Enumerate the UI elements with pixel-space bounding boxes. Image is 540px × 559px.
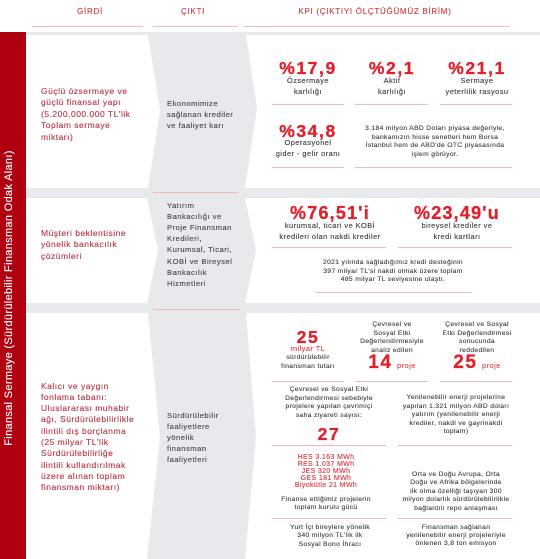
kpi label: aktif: Aktif bbox=[384, 76, 400, 85]
renewable investment note: Yenilenebilir enerji projelerine bbox=[407, 394, 505, 401]
kpi: retail credit: %23,49'u bbox=[414, 203, 500, 223]
market value note: işlem görüyor. bbox=[412, 151, 458, 158]
repo agreement note: bağlantılı repo anlaşması bbox=[414, 504, 498, 512]
band: middle one bbox=[26, 188, 540, 198]
rejected projects note bbox=[443, 321, 511, 354]
credit support note: 397 milyar TL'si nakdi olmak üzere toplam bbox=[323, 268, 463, 275]
credit support note: 485 milyar TL seviyesine ulaştı. bbox=[341, 276, 445, 283]
output text: row three: finansman bbox=[167, 444, 207, 453]
kpi label: ozsermaye: Özsermaye bbox=[287, 76, 329, 85]
rule bbox=[440, 104, 512, 105]
repo agreement note: Orta ve Doğu Avrupa, Orta bbox=[412, 470, 500, 478]
output text: row one: sağlanan krediler bbox=[167, 110, 233, 118]
input text: row three: ilintili dış borçlanma bbox=[41, 426, 126, 436]
social bond note: Sosyal Bono İhracı bbox=[299, 541, 361, 548]
renewable investment note: toplam) bbox=[444, 428, 468, 435]
emission note bbox=[406, 524, 506, 547]
output text: row two: Proje Finansman bbox=[167, 223, 232, 232]
output text: row two: Bankacılığı ve bbox=[167, 212, 222, 221]
renewable investment note: krediler, nakdi ve gayrinakdi bbox=[410, 420, 502, 427]
analysed projects note: Çevresel ve bbox=[372, 321, 412, 328]
input text: row three: ilintili kullandırılmak bbox=[41, 460, 126, 470]
kpi: corporate credit: %76,51'i bbox=[290, 203, 370, 223]
analysed projects note: Sosyal Etki bbox=[373, 330, 411, 337]
input text: row three: ağı, Sürdürülebilirlikle bbox=[41, 414, 134, 424]
chevron: row one bbox=[148, 35, 257, 188]
emission note: önlenen 3,8 ton emisyon bbox=[415, 540, 497, 547]
sidebar bbox=[0, 32, 26, 559]
market value note bbox=[365, 125, 505, 158]
rule bbox=[355, 104, 428, 105]
stat label: sustainable finance: sürdürülebilir bbox=[286, 354, 330, 361]
output text: row three: faaliyetlere bbox=[167, 422, 210, 431]
input text: row three: Kalıcı ve yaygın bbox=[41, 380, 109, 390]
output text: row two: Kredileri, bbox=[167, 234, 202, 243]
kpi label: ozsermaye bbox=[287, 76, 329, 96]
input text: row two: çözümleri bbox=[41, 250, 82, 260]
heading: kpi: KPI (ÇIKTIYI ÖLÇTÜĞÜMÜZ BİRİM) bbox=[298, 7, 452, 16]
installed capacity label: toplam kurulu gücü bbox=[294, 504, 357, 510]
header rule: cikti bbox=[153, 26, 238, 27]
rule bbox=[355, 381, 428, 382]
kpi label: operasyonel: gider - gelir oranı bbox=[276, 148, 340, 158]
market value note: 3.184 milyon ABD Doları piyasa değeriyle, bbox=[365, 125, 505, 132]
emission note: Finansman sağlanan bbox=[422, 524, 490, 531]
repo agreement note bbox=[402, 470, 510, 512]
rule bbox=[272, 518, 386, 519]
kpi label: ozsermaye: karlılığı bbox=[294, 86, 322, 96]
analysed projects note: Değerlendirmesiyle bbox=[360, 338, 424, 345]
input text: row three: fonlama tabanı: bbox=[41, 392, 107, 402]
output text: row one bbox=[167, 98, 233, 130]
renewable investment note: yatırım (yenilenebilir enerji bbox=[412, 411, 500, 418]
output text: row three: Sürdürülebilir bbox=[167, 410, 219, 420]
rejected projects note: sonucunda bbox=[459, 338, 495, 345]
renewable investment note: yapılan 1.321 milyon ABD doları bbox=[403, 403, 509, 410]
kpi: sermaye: %21,1 bbox=[448, 58, 506, 78]
output text: row two: KOBİ ve Bireysel bbox=[167, 257, 232, 266]
kpi label: operasyonel: Operasyonel bbox=[285, 138, 331, 147]
rule: chevron two bbox=[153, 309, 240, 310]
site visits note: Çevresel ve Sosyal Etki bbox=[290, 386, 368, 393]
kpi label: corporate credit bbox=[279, 221, 381, 240]
installed capacity label bbox=[281, 496, 371, 510]
kpi label: corporate credit: kurumsal, ticari ve KOBİ bbox=[285, 221, 375, 230]
installed capacity list: GES 181 MWh bbox=[301, 475, 351, 482]
rejected projects note: reddedilen bbox=[460, 347, 494, 354]
rejected projects note: Çevresel ve Sosyal bbox=[445, 321, 509, 328]
rule bbox=[315, 292, 472, 293]
installed capacity list bbox=[295, 454, 357, 489]
input text: row one: miktarı) bbox=[41, 132, 73, 142]
stat unit: milyar TL: milyar TL bbox=[291, 344, 325, 353]
kpi label: sermaye bbox=[446, 76, 508, 96]
input text: row three: Sürdürülebilirliğe bbox=[41, 448, 113, 458]
input text: row three: Uluslararası muhabir bbox=[41, 403, 129, 413]
kpi label: retail credit bbox=[422, 221, 492, 240]
site visits note bbox=[285, 386, 373, 419]
rule bbox=[398, 247, 512, 248]
social bond note bbox=[290, 524, 370, 548]
output text: row two: Hizmetleri bbox=[167, 279, 206, 288]
input text: row one: güçlü finansal yapı bbox=[41, 97, 121, 107]
rule bbox=[272, 247, 386, 248]
output text: row one: Ekonomimize bbox=[167, 98, 218, 108]
installed capacity label: Finanse ettiğimiz projelerin bbox=[281, 496, 371, 502]
heading: cikti: ÇIKTI bbox=[181, 7, 205, 16]
input text: row three: (25 milyar TL'lik bbox=[41, 437, 109, 447]
stat: 25 proje: 25 proje bbox=[453, 352, 501, 373]
repo agreement note: ilk olma özelliği taşıyan 300 bbox=[410, 488, 502, 494]
site visits note: Değerlendirmesi sebebiyle bbox=[285, 395, 373, 402]
kpi: ozsermaye: %17,9 bbox=[279, 58, 337, 78]
stat label: sustainable finance: finansman tutarı bbox=[281, 363, 335, 370]
site visits note: projelere yapılan çevrimiçi bbox=[285, 403, 373, 410]
kpi label: retail credit: kredi kartları bbox=[433, 232, 481, 240]
kpi label: aktif: karlılığı bbox=[378, 86, 406, 96]
rule bbox=[398, 445, 512, 446]
chevron: row three bbox=[147, 313, 256, 559]
kpi label: sermaye: yeterlilik rasyosu bbox=[446, 86, 508, 96]
rule bbox=[272, 167, 344, 168]
rule: chevron one bbox=[153, 192, 238, 193]
repo agreement note: Doğu ve Afrika bölgelerinde bbox=[410, 479, 502, 486]
kpi: aktif: %2,1 bbox=[369, 58, 415, 78]
rule bbox=[272, 445, 386, 446]
rule bbox=[272, 381, 344, 382]
installed capacity list: RES 1.037 MWh bbox=[298, 461, 354, 468]
output text: row one: ve faaliyet karı bbox=[167, 120, 224, 130]
credit support note: 2021 yılında sağladığımız kredi desteğinin bbox=[323, 259, 463, 266]
input text: row two bbox=[41, 228, 126, 260]
input text: row one: (5.200.000.000 TL'lik bbox=[41, 108, 130, 118]
input text: row one: Toplam sermaye bbox=[41, 120, 110, 130]
sidebar title: Finansal Sermaye (Sürdürülebilir Finansman Odak Alanı) bbox=[2, 150, 14, 446]
analysed projects note bbox=[360, 321, 424, 354]
kpi label: aktif bbox=[378, 76, 406, 96]
output text: row three: faaliyetleri bbox=[167, 455, 207, 464]
social bond note: 340 milyon TL'lik ilk bbox=[297, 532, 363, 539]
market value note: İstanbul hem de ABD'de OTC piyasasında bbox=[366, 142, 504, 149]
rule bbox=[355, 167, 512, 168]
installed capacity list: Biyokütle 21 MWh bbox=[295, 482, 357, 489]
output text: row two bbox=[167, 200, 232, 288]
stat: 14 proje: 14 proje bbox=[368, 352, 416, 373]
input text: row three: üzere alınan toplam bbox=[41, 471, 125, 481]
rule bbox=[272, 104, 344, 105]
kpi label: corporate credit: kredileri olan nakdi krediler bbox=[279, 232, 381, 240]
output text: row two: Kurumsal, Ticari, bbox=[167, 245, 232, 254]
output text: row two: Bankacılık bbox=[167, 268, 207, 277]
kpi: operasyonel: %34,8 bbox=[279, 121, 337, 141]
renewable investment note bbox=[402, 394, 509, 435]
band: top bbox=[26, 32, 540, 35]
site visits note: saha ziyareti sayısı: bbox=[296, 412, 362, 419]
kpi label: sermaye: Sermaye bbox=[461, 76, 493, 85]
heading: girdi: GİRDİ bbox=[77, 7, 103, 16]
input text: row two: Müşteri beklentisine bbox=[41, 228, 126, 238]
kpi label: retail credit: bireysel krediler ve bbox=[422, 221, 492, 230]
rejected projects note: Etki Değerlendirmesi bbox=[443, 330, 511, 337]
output text: row three bbox=[167, 410, 219, 464]
analysed projects note: analiz edilen bbox=[371, 347, 413, 354]
credit support note bbox=[323, 259, 463, 283]
stat: 25: 25 bbox=[297, 327, 319, 347]
installed capacity list: HES 3.163 MWh bbox=[298, 454, 354, 460]
kpi label: operasyonel bbox=[276, 138, 340, 158]
output text: row two: Yatırım bbox=[167, 200, 194, 210]
input text: row three: finansman miktarı) bbox=[41, 482, 120, 492]
stat label: sustainable finance bbox=[281, 354, 335, 370]
repo agreement note: milyon dolarlık sürdürülebilirlikle bbox=[402, 496, 510, 503]
header rule: kpi bbox=[244, 26, 510, 27]
input text: row three bbox=[41, 380, 134, 492]
emission note: yenilenebilir enerji projeleriyle bbox=[406, 532, 506, 539]
header rule: girdi bbox=[32, 26, 143, 27]
installed capacity list: JES 320 MWh bbox=[302, 468, 350, 475]
input text: row one bbox=[41, 86, 130, 142]
rule bbox=[440, 381, 512, 382]
chevron: row two bbox=[147, 198, 256, 303]
output text: row three: yönelik bbox=[167, 433, 194, 442]
band: middle two bbox=[26, 303, 540, 313]
social bond note: Yurt İçi bireylere yönelik bbox=[290, 524, 370, 531]
input text: row one: Güçlü özsermaye ve bbox=[41, 86, 127, 96]
market value note: bankamızın hisse senetleri hem Borsa bbox=[372, 134, 498, 141]
stat: 27: 27 bbox=[318, 424, 340, 444]
input text: row two: yönelik bankacılık bbox=[41, 239, 117, 249]
rule bbox=[398, 518, 512, 519]
